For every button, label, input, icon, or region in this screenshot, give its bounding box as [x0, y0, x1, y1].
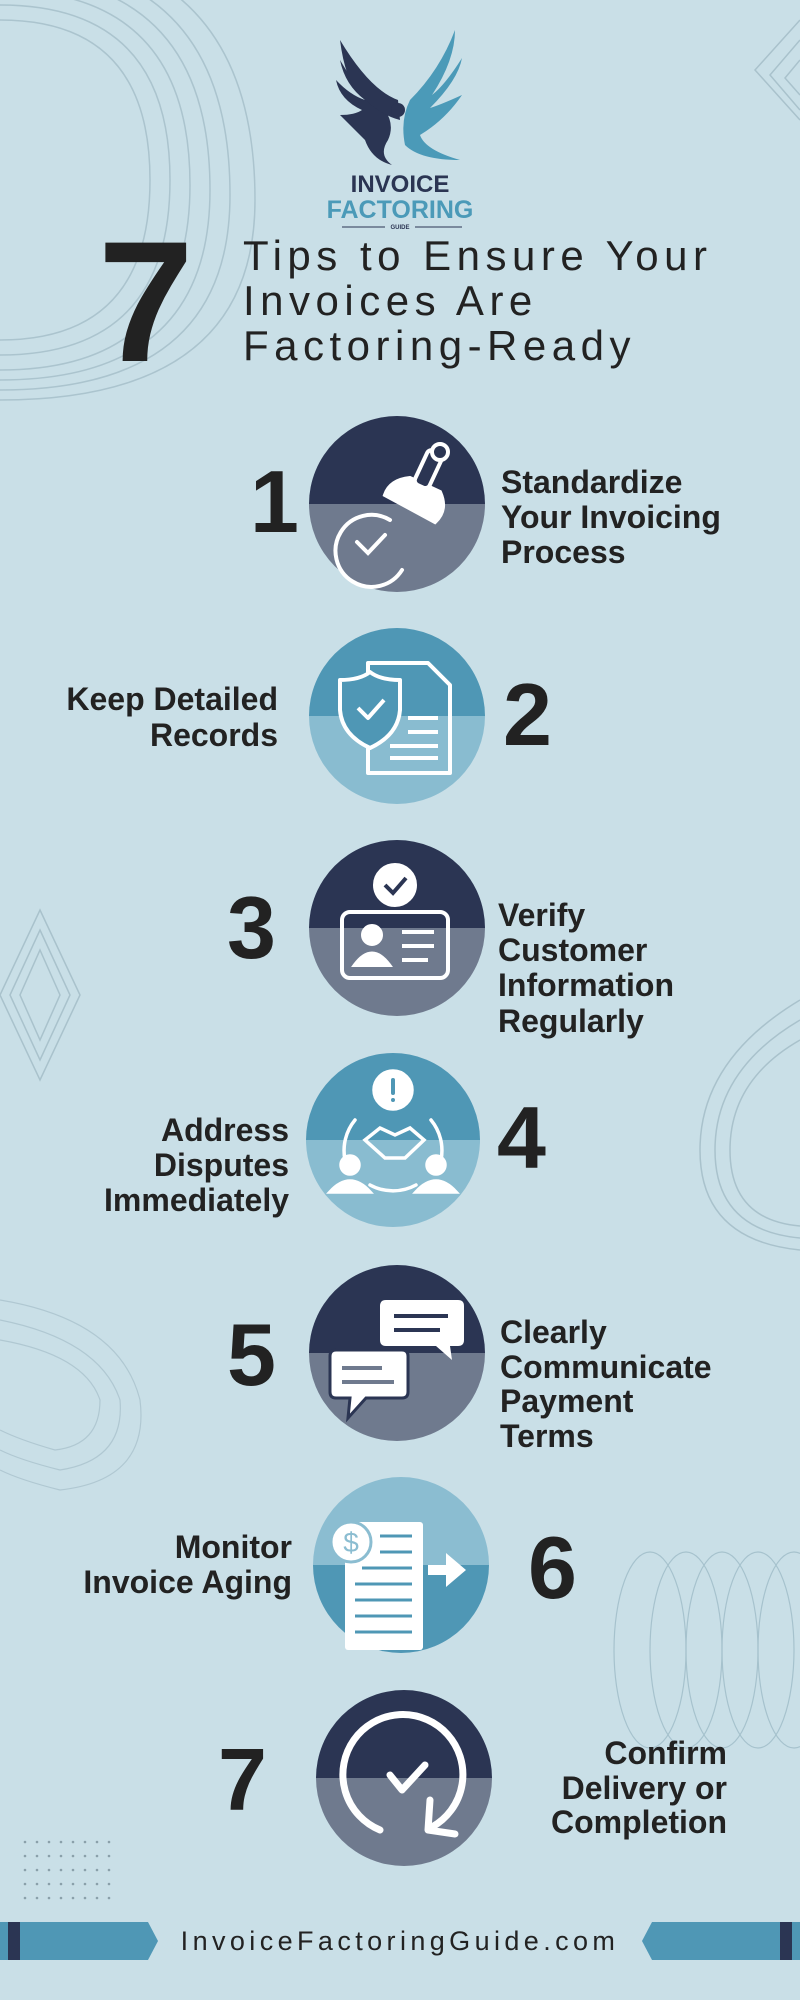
icon: invoice with arrow: $ — [343, 1527, 359, 1558]
tip 7: 7 — [218, 1730, 267, 1829]
tip 4: Immediately — [104, 1182, 289, 1218]
tip 4: 4 — [497, 1088, 546, 1187]
circle 5 — [309, 1265, 485, 1441]
tip 5: Terms — [500, 1418, 594, 1454]
tip 3: Regularly — [498, 1003, 644, 1039]
logo: GUIDE — [390, 225, 410, 231]
icon: invoice with arrow — [331, 1522, 466, 1650]
circle 6 — [313, 1477, 489, 1653]
tip 5: 5 — [227, 1305, 276, 1404]
icon: eagle — [336, 30, 462, 165]
tip 7: Completion — [551, 1804, 727, 1840]
tip 5 — [227, 1265, 712, 1454]
tip 2: Records — [150, 717, 278, 753]
tip 3: Information — [498, 967, 674, 1003]
tip 1: Your Invoicing — [501, 499, 721, 535]
tip 5: Payment — [500, 1383, 634, 1419]
decorative diamonds top-right — [755, 20, 800, 120]
website: InvoiceFactoringGuide.com — [181, 1926, 619, 1956]
title: Invoices Are — [243, 277, 538, 324]
tip 2: 2 — [503, 665, 552, 764]
tip 4: Disputes — [154, 1147, 289, 1183]
circle 4 — [306, 1053, 480, 1227]
tip 7 — [218, 1690, 727, 1866]
decorative arcs right — [700, 1000, 800, 1250]
decorative dot grid — [24, 1841, 110, 1899]
tip 6: 6 — [528, 1518, 577, 1617]
circle 3 — [309, 840, 485, 1016]
tip 6: Monitor — [175, 1529, 292, 1565]
tip 1: Standardize — [501, 464, 682, 500]
icon: chat bubbles — [330, 1300, 464, 1418]
circle 2 — [309, 628, 485, 804]
tip 3 — [227, 840, 674, 1039]
right banner — [642, 1922, 800, 1960]
tip 1 — [250, 416, 721, 592]
tip 7: Confirm — [604, 1735, 727, 1771]
decorative rings right — [614, 1552, 800, 1748]
title: Factoring-Ready — [243, 322, 636, 369]
decorative arcs top-left — [0, 0, 255, 400]
left banner — [0, 1922, 158, 1960]
title: Tips to Ensure Your — [243, 232, 712, 279]
tip 5: Clearly — [500, 1314, 607, 1350]
title — [98, 206, 712, 398]
icon: stamp — [335, 444, 448, 587]
tip 2: Keep Detailed — [66, 681, 278, 717]
tip 6: Invoice Aging — [83, 1564, 292, 1600]
tip 4: Address — [161, 1112, 289, 1148]
logo text: INVOICE — [351, 171, 449, 198]
logo: FACTORING — [327, 196, 473, 224]
tip 2 — [66, 628, 552, 804]
footer — [0, 1922, 800, 1960]
icon: ID card with check — [342, 865, 448, 978]
icon: document with shield — [340, 663, 450, 773]
icon: circular arrow check — [343, 1715, 463, 1834]
circle 1 — [309, 416, 485, 592]
icon: handshake dispute — [330, 1071, 456, 1192]
decorative contour left — [0, 1300, 141, 1490]
logo — [327, 30, 473, 231]
tip 4 — [104, 1053, 546, 1227]
tip 7: Delivery or — [562, 1770, 727, 1806]
tip 6 — [83, 1477, 577, 1653]
circle 7 — [316, 1690, 492, 1866]
tip 3: Verify — [498, 897, 585, 933]
tip 5: Communicate — [500, 1349, 712, 1385]
tip 1: 1 — [250, 452, 299, 551]
tip 1: Process — [501, 534, 626, 570]
tip 3: 3 — [227, 878, 276, 977]
title: 7 — [98, 206, 194, 398]
tip 3: Customer — [498, 932, 647, 968]
decorative diamonds left — [0, 910, 80, 1080]
